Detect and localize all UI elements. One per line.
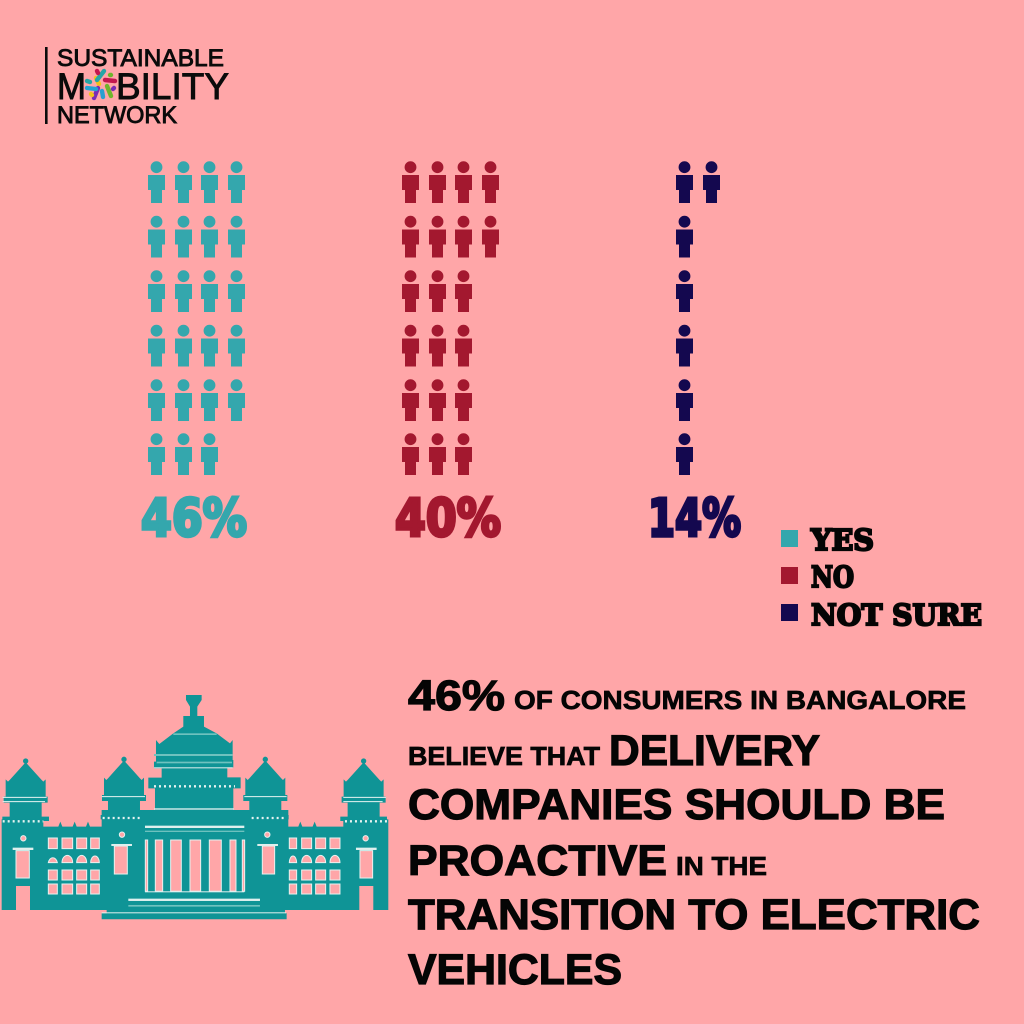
pictogram: yes 46% (148, 161, 245, 475)
round windows (21, 836, 26, 841)
text block: headline: DELIVERY (609, 727, 820, 775)
text block: headline: TRANSITION TO ELECTRIC (408, 891, 980, 939)
text block: headline: VEHICLES (408, 946, 622, 994)
pictogram: no 40% (402, 161, 499, 475)
pictogram: not sure 14% (676, 161, 720, 475)
text block: headline (408, 672, 980, 994)
icon: logo pinwheel (87, 71, 115, 98)
towers (2, 758, 49, 821)
icon: Vidhana Soudha building (2, 695, 388, 919)
text block: headline: OF CONSUMERS IN BANGALORE (514, 685, 966, 715)
text block: headline: COMPANIES SHOULD BE (408, 781, 945, 829)
percentage: 46%: 46% (141, 489, 247, 549)
windows right (289, 838, 340, 894)
legend: NOT SURE (811, 598, 982, 632)
logo: Sustainable Mobility Network (45, 45, 229, 129)
legend: NO (811, 560, 854, 594)
portico openings (145, 840, 245, 891)
decorative dotted cornices (3, 786, 388, 821)
text block: headline: 46% (408, 672, 505, 720)
legend: YES (810, 523, 874, 557)
main body (2, 810, 388, 919)
text block: headline: PROACTIVE (408, 837, 667, 885)
logo: Sustainable Mobility Network: NETWORK (57, 102, 178, 129)
percentage: 14%: 14% (648, 489, 741, 549)
logo: Sustainable Mobility Network: M (57, 66, 86, 107)
tall windows (16, 846, 373, 878)
percentage: 40%: 40% (395, 489, 501, 549)
logo: Sustainable Mobility Network: BILITY (116, 66, 229, 107)
central dome (148, 695, 241, 812)
logo: Sustainable Mobility Network: SUSTAINABLE (57, 45, 224, 72)
text block: headline: BELIEVE THAT (408, 741, 600, 771)
decorative light bands (13, 767, 377, 913)
legend (781, 523, 982, 632)
text block: headline: IN THE (676, 851, 767, 881)
windows left (48, 838, 99, 894)
